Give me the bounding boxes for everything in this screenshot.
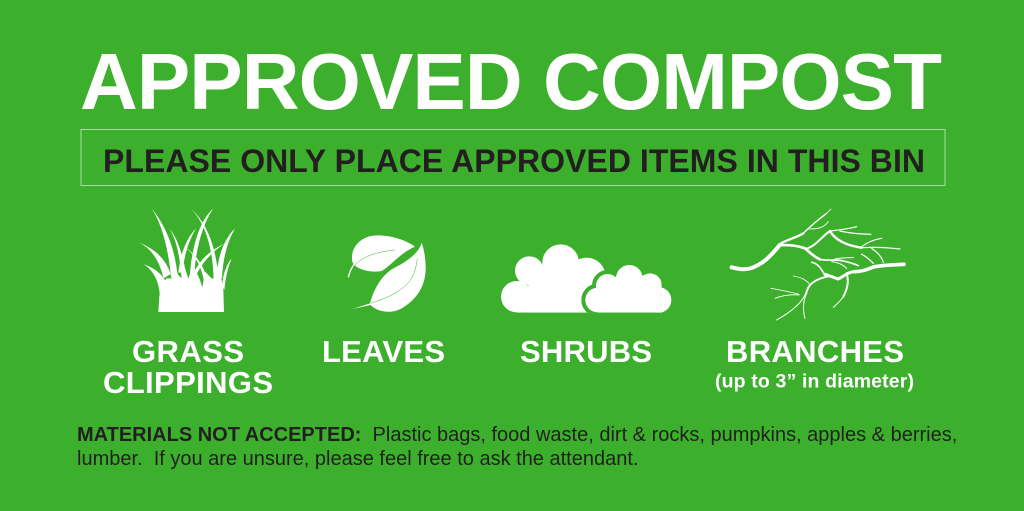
icon: grass bbox=[138, 208, 235, 312]
icon: branches bbox=[732, 209, 904, 320]
materials not accepted text: lumber. If you are unsure, please feel free to ask the attendant. bbox=[77, 448, 638, 470]
label: grass clippings: CLIPPINGS bbox=[103, 365, 273, 400]
label: grass clippings bbox=[103, 334, 273, 400]
icon: leaves bbox=[348, 235, 426, 312]
icon: shrubs bbox=[501, 244, 671, 318]
instruction banner: PLEASE ONLY PLACE APPROVED ITEMS IN THIS BIN bbox=[103, 143, 925, 179]
materials not accepted text: MATERIALS NOT ACCEPTED: Plastic bags, food waste, dirt & rocks, pumpkins, apples & berries, bbox=[77, 424, 957, 446]
label: branches: BRANCHES bbox=[726, 334, 904, 369]
label: branches: (up to 3” in diameter) bbox=[715, 370, 914, 392]
title: APPROVED COMPOST bbox=[80, 37, 942, 126]
materials not accepted text bbox=[77, 424, 957, 470]
label: shrubs: SHRUBS bbox=[520, 334, 652, 369]
label: branches bbox=[715, 334, 914, 392]
label: grass clippings: GRASS bbox=[132, 334, 244, 369]
label: leaves: LEAVES bbox=[322, 334, 445, 369]
instruction banner bbox=[81, 130, 945, 186]
